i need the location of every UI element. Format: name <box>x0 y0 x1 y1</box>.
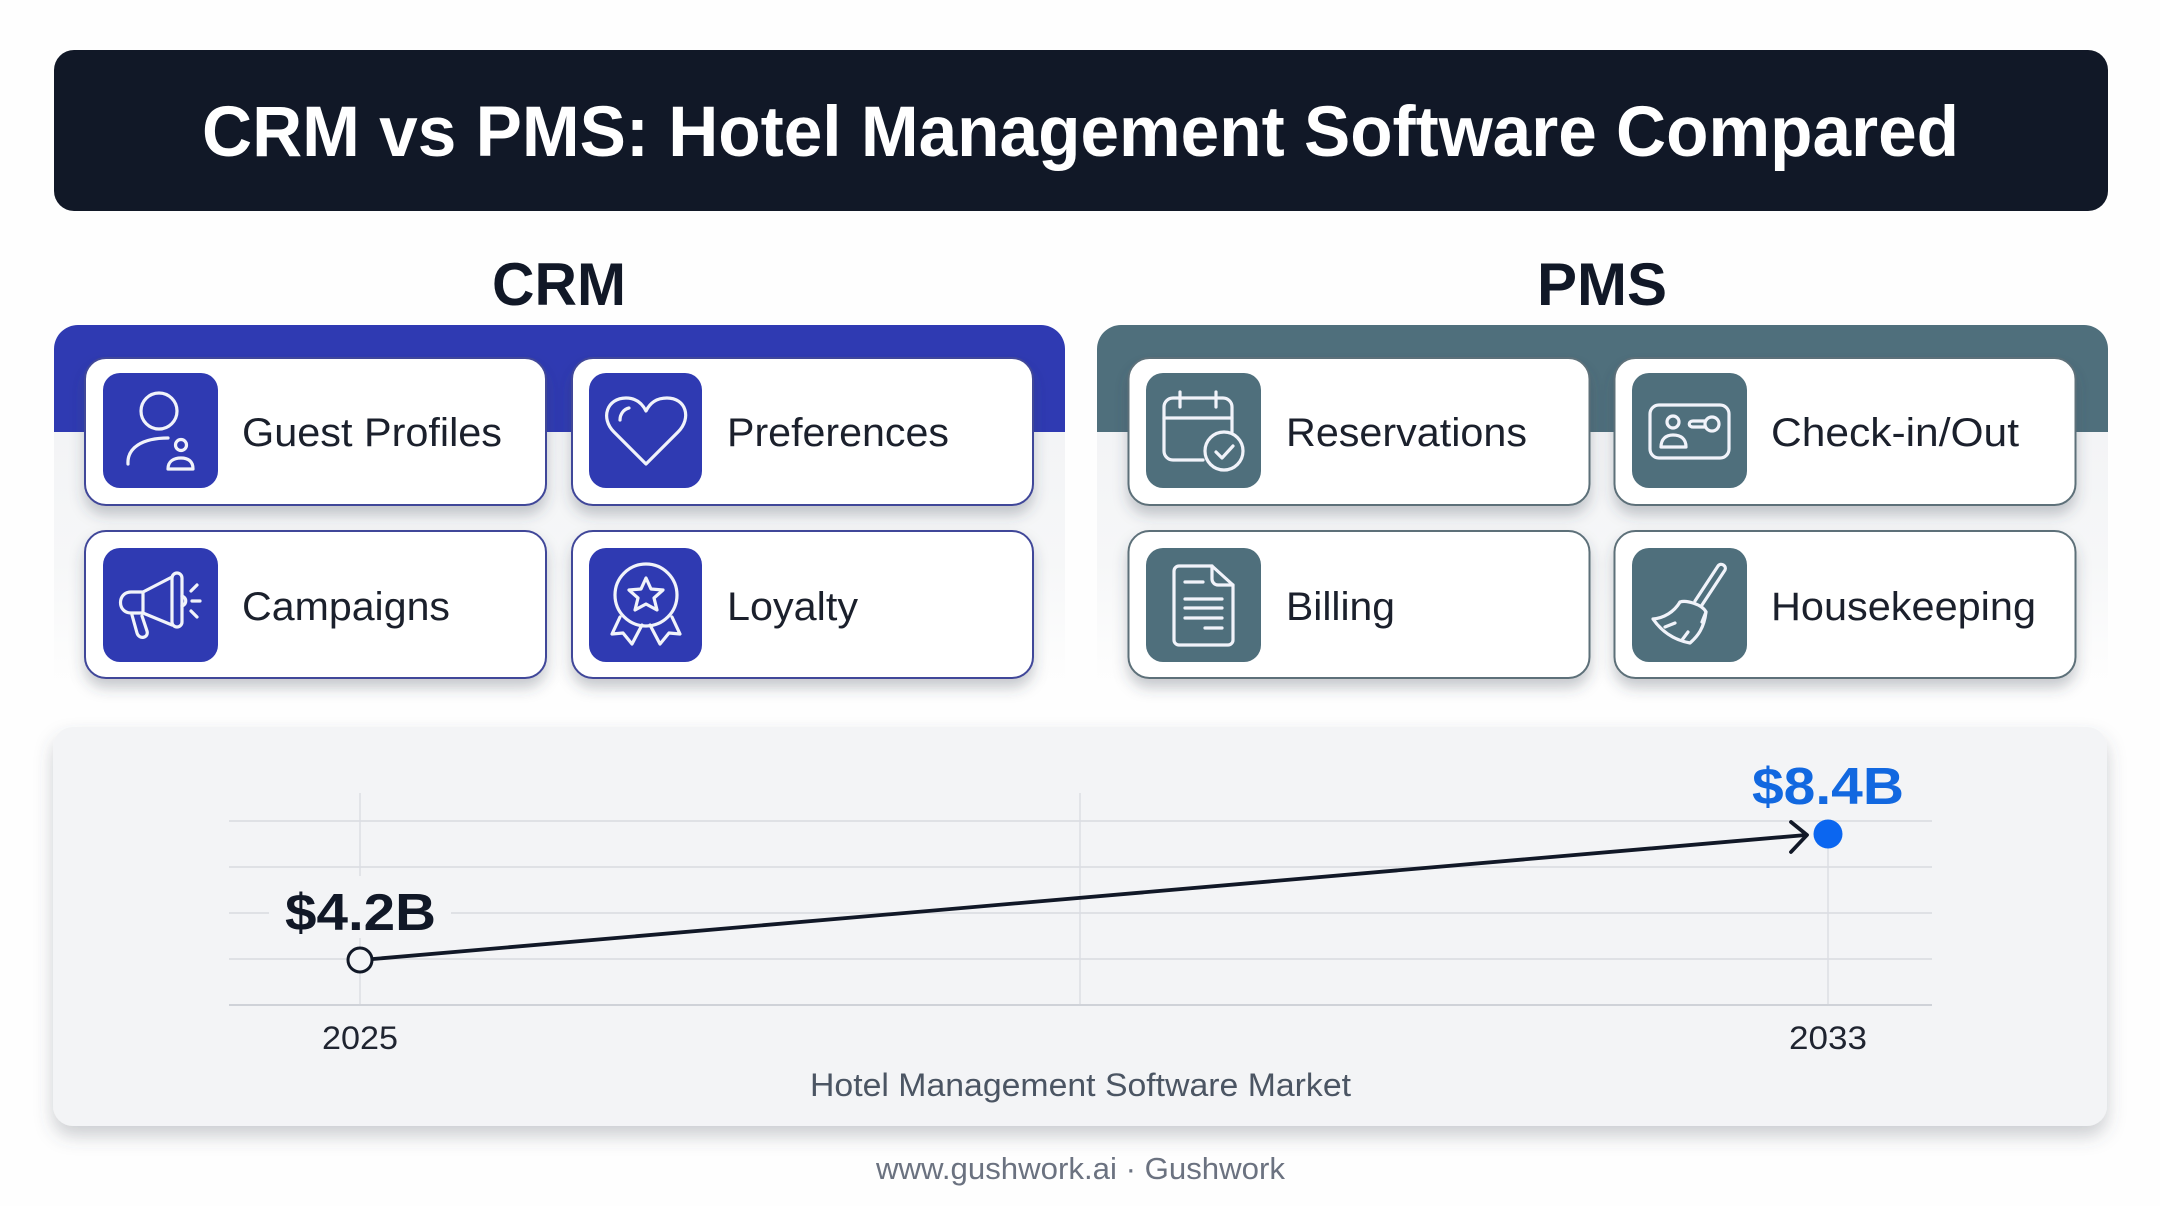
title bar: CRM vs PMS: Hotel Management Software Compared <box>202 93 1959 172</box>
icon: broom <box>1653 564 1725 643</box>
heading: PMS: PMS <box>1537 251 1667 318</box>
axis label: 2025: 2025 <box>322 1020 398 1056</box>
card: Billing <box>1128 531 1590 678</box>
card: Guest Profiles <box>85 358 546 505</box>
card: Loyalty: Loyalty <box>727 585 858 629</box>
icon: megaphone <box>120 573 200 637</box>
card: Check-in/Out <box>1614 358 2076 505</box>
axis label: 2033: 2033 <box>1789 1020 1867 1056</box>
footer: www.gushwork.ai · Gushwork <box>875 1151 1285 1186</box>
card: Check-in/Out: Check-in/Out <box>1771 411 2019 455</box>
chart caption: Hotel Management Software Market <box>810 1067 1351 1103</box>
card: Guest Profiles: Guest Profiles <box>242 411 502 455</box>
point: 2025 <box>348 948 372 972</box>
icon: heart <box>607 398 686 464</box>
card: Reservations <box>1128 358 1590 505</box>
title bar <box>54 50 2108 211</box>
icon: guest person <box>128 393 193 469</box>
panel: market chart <box>53 727 2107 1126</box>
point: 2033 <box>1814 820 1842 848</box>
heading: CRM: CRM <box>492 251 626 318</box>
icon: document <box>1174 566 1233 645</box>
card: Loyalty <box>572 531 1033 678</box>
label: 2025 value <box>269 876 451 942</box>
chart grid <box>229 793 1932 1005</box>
icon: loyalty badge <box>612 564 680 644</box>
icon: ID card and key <box>1650 405 1729 458</box>
trend arrow <box>373 822 1807 959</box>
panel: PMS <box>1097 325 2108 692</box>
card: Campaigns: Campaigns <box>242 585 450 629</box>
card: Housekeeping: Housekeeping <box>1771 585 2036 629</box>
card: Billing: Billing <box>1286 585 1395 629</box>
icon: calendar check <box>1164 392 1243 470</box>
card: Preferences <box>572 358 1033 505</box>
label: 2025 value: $4.2B <box>285 884 436 942</box>
card: Housekeeping <box>1614 531 2076 678</box>
panel: CRM <box>54 325 1065 692</box>
card: Campaigns <box>85 531 546 678</box>
card: Reservations: Reservations <box>1286 411 1527 455</box>
card: Preferences: Preferences <box>727 411 949 455</box>
label: 2033 value: $8.4B <box>1752 758 1904 816</box>
